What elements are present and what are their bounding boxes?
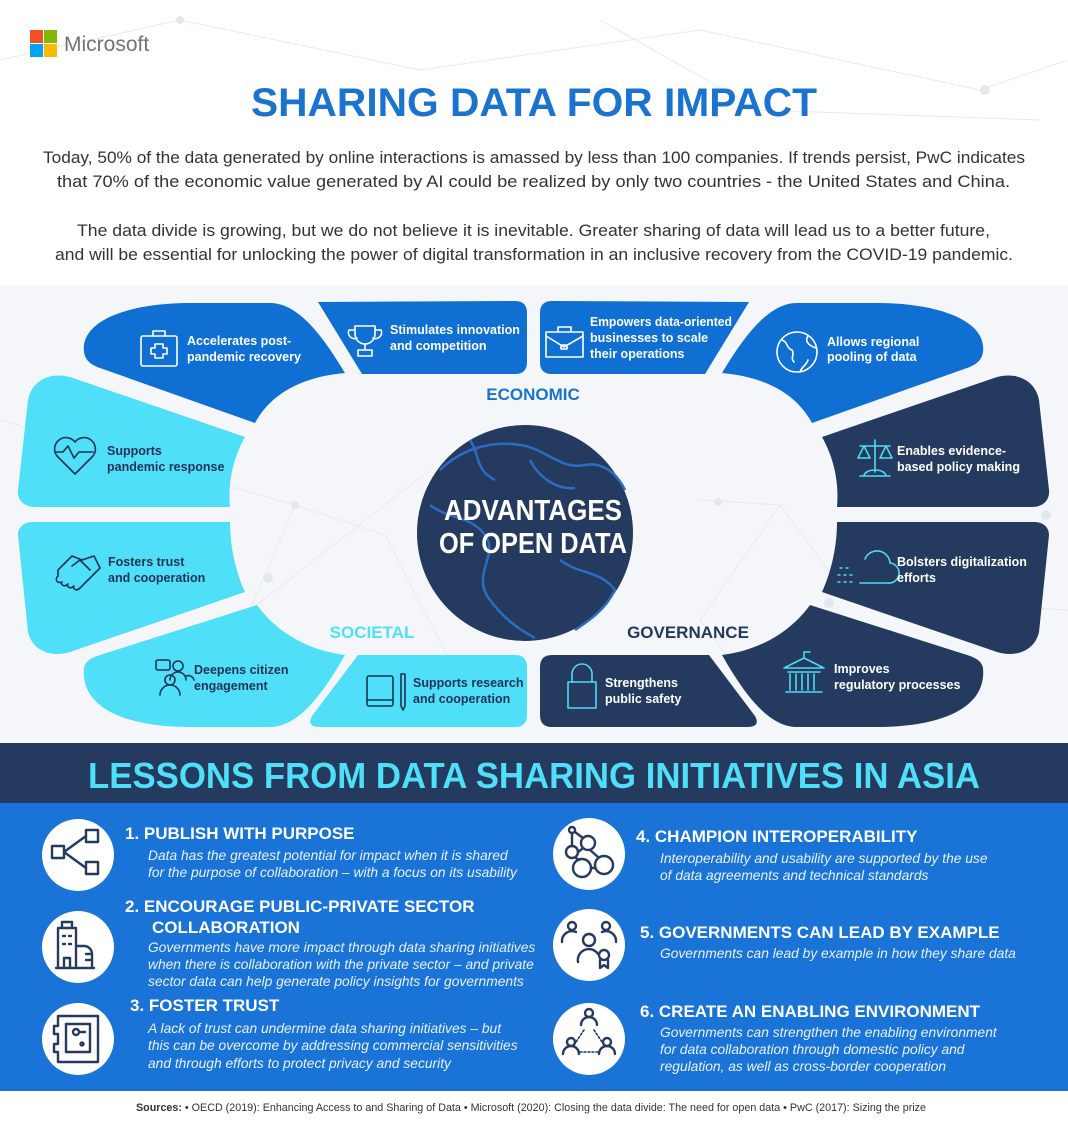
- lesson 4: 4. CHAMPION INTEROPERABILITY: [636, 827, 918, 846]
- title: SHARING DATA FOR IMPACT: [251, 81, 817, 125]
- lesson 2: 2. ENCOURAGE PUBLIC-PRIVATE SECTOR: [125, 897, 474, 916]
- petal: improves: Improves: [834, 662, 890, 676]
- petal: supports research: [367, 674, 523, 710]
- lesson 2: when there is collaboration with the private sector – and private: [148, 957, 534, 972]
- petal: stimulates: and competition: [390, 339, 487, 353]
- petal: bolsters: efforts: [897, 571, 936, 585]
- petal: enables: [858, 440, 1020, 476]
- petal: supports pandemic: pandemic response: [107, 460, 224, 474]
- panel: lessons: [0, 803, 1068, 1091]
- petal: accelerates: Accelerates post-: [187, 334, 291, 348]
- petal: empowers: Empowers data-oriented: [590, 315, 732, 329]
- lesson 4: Interoperability and usability are supported by the use: [660, 851, 988, 866]
- lesson 2: COLLABORATION: [152, 918, 300, 937]
- lesson 5: Governments can lead by example in how they share data: [660, 946, 1016, 961]
- petal shapes right: [540, 301, 1049, 727]
- lesson 4: of data agreements and technical standards: [660, 868, 929, 883]
- lesson 3: and through efforts to protect privacy and security: [148, 1056, 452, 1071]
- petal: accelerates: pandemic recovery: [187, 350, 301, 364]
- intro text: that 70% of the economic value generated by AI could be realized by only two countries - the United States and China.: [57, 173, 1010, 191]
- petal: fosters: and cooperation: [108, 571, 205, 585]
- petal: strengthens: [568, 664, 681, 708]
- lesson 1: 1. PUBLISH WITH PURPOSE: [125, 824, 355, 843]
- intro text: and will be essential for unlocking the power of digital transformation in an inclusive recovery from the COVID-19 pandemic.: [55, 246, 1013, 264]
- lesson 2: Governments have more impact through data sharing initiatives: [148, 940, 535, 955]
- logo: Microsoft: [30, 30, 149, 57]
- petal: empowers: their operations: [590, 347, 685, 361]
- label: SOCIETAL: SOCIETAL: [330, 623, 414, 642]
- logo: Microsoft: Microsoft: [64, 33, 149, 56]
- petal: supports research: Supports research: [413, 676, 523, 690]
- lesson 3: [42, 996, 518, 1075]
- petal: fosters: Fosters trust: [108, 555, 185, 569]
- petal: supports pandemic: Supports: [107, 444, 162, 458]
- intro text: [43, 149, 1025, 264]
- lesson 5: [553, 909, 1016, 981]
- lessons heading band: [0, 743, 1068, 803]
- petal: empowers: [546, 315, 732, 361]
- petal: enables: Enables evidence-: [897, 444, 1006, 458]
- petal: fosters: [56, 555, 205, 590]
- intro text: The data divide is growing, but we do not believe it is inevitable. Greater sharing of data will lead us to a better future,: [77, 222, 990, 240]
- petal: deepens: Deepens citizen: [194, 663, 288, 677]
- petal: bolsters: Bolsters digitalization: [897, 555, 1027, 569]
- petal: supports research: and cooperation: [413, 692, 510, 706]
- petal shapes left: [18, 301, 527, 727]
- lesson 5: 5. GOVERNMENTS CAN LEAD BY EXAMPLE: [640, 923, 1000, 942]
- lesson 3: 3. FOSTER TRUST: [130, 996, 280, 1015]
- petal: allows regional: Allows regional: [827, 335, 919, 349]
- petal: bolsters: [838, 551, 1027, 585]
- petal: accelerates: [141, 331, 301, 366]
- lesson 3: A lack of trust can undermine data sharing initiatives – but: [147, 1021, 502, 1036]
- lesson 6: Governments can strengthen the enabling environment: [660, 1025, 998, 1040]
- petal: empowers: businesses to scale: [590, 331, 708, 345]
- center globe: OF OPEN DATA: [439, 528, 627, 560]
- lesson 2: [42, 897, 535, 989]
- petal: improves: [784, 652, 960, 692]
- petal: strengthens: public safety: [605, 692, 681, 706]
- lesson 1: [42, 819, 518, 891]
- lessons heading band: LESSONS FROM DATA SHARING INITIATIVES IN ASIA: [88, 755, 980, 796]
- petal: strengthens: Strengthens: [605, 676, 678, 690]
- petal: improves: regulatory processes: [834, 678, 960, 692]
- lesson 3: this can be overcome by addressing commercial sensitivities: [148, 1038, 518, 1053]
- petal: deepens: [156, 660, 288, 695]
- panel: advantages wheel: [18, 301, 1049, 727]
- lesson 2: sector data can help generate policy insights for governments: [148, 974, 524, 989]
- petal: enables: based policy making: [897, 460, 1020, 474]
- petal: stimulates: [348, 323, 520, 356]
- lesson 6: [553, 1002, 998, 1075]
- lesson 4: [553, 818, 988, 890]
- center globe: [417, 425, 633, 641]
- lesson 1: for the purpose of collaboration – with a focus on its usability: [148, 865, 518, 880]
- sources footer: Sources: • OECD (2019): Enhancing Access to and Sharing of Data • Microsoft (2020): Closing the data divide: The need for open data • PwC (2017): Sizing the prize: [136, 1102, 926, 1114]
- label: ECONOMIC: ECONOMIC: [486, 385, 580, 404]
- lesson 6: 6. CREATE AN ENABLING ENVIRONMENT: [640, 1002, 981, 1021]
- center globe: ADVANTAGES: [444, 495, 622, 527]
- petal: supports pandemic: [55, 438, 224, 474]
- petal: deepens: engagement: [194, 679, 268, 693]
- lesson 1: Data has the greatest potential for impact when it is shared: [148, 848, 509, 863]
- label: GOVERNANCE: GOVERNANCE: [627, 623, 749, 642]
- petal: allows regional: pooling of data: [827, 350, 918, 364]
- petal: allows regional: [777, 332, 919, 372]
- petal: stimulates: Stimulates innovation: [390, 323, 520, 337]
- lesson 6: for data collaboration through domestic policy and: [660, 1042, 966, 1057]
- intro text: Today, 50% of the data generated by online interactions is amassed by less than 100 companies. If trends persist, PwC indicates: [43, 149, 1025, 167]
- lesson 6: regulation, as well as cross-border cooperation: [660, 1059, 946, 1074]
